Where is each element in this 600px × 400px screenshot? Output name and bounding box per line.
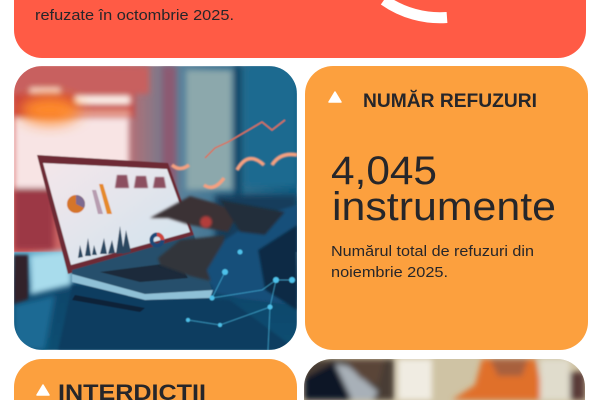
icon: white triangle: [329, 92, 341, 102]
stat: 4,045 instruments: 4,045: [331, 149, 437, 193]
panel: bans card: [14, 359, 297, 400]
dark arm area: [215, 195, 297, 300]
text: description: noiembrie 2025.: [331, 264, 448, 281]
stat: 4,045 instruments: instrumente: [332, 185, 556, 229]
icon: white progress ring: [384, 0, 447, 18]
screen charts: [67, 175, 166, 258]
panel: top red card: [14, 0, 586, 58]
laptop: [37, 155, 194, 274]
panel: laptop analytics photo: [14, 66, 297, 350]
network dots: [186, 250, 295, 327]
text: description: Numărul total de refuzuri din: [331, 243, 534, 260]
panel: refusal count card: [305, 66, 588, 350]
text: description: [331, 243, 534, 281]
icon: white triangle: [37, 385, 49, 395]
hands: [150, 196, 297, 310]
table: [14, 252, 297, 350]
heading: number of refusals: NUMĂR REFUZURI: [363, 90, 537, 112]
stat: 4,045 instruments: [331, 149, 556, 229]
panel: business people photo: [304, 359, 585, 400]
orange glare: [20, 96, 80, 124]
glowing orange arcs: [172, 154, 297, 187]
text: red card caption: refuzate în octombrie 2025.: [35, 8, 234, 24]
